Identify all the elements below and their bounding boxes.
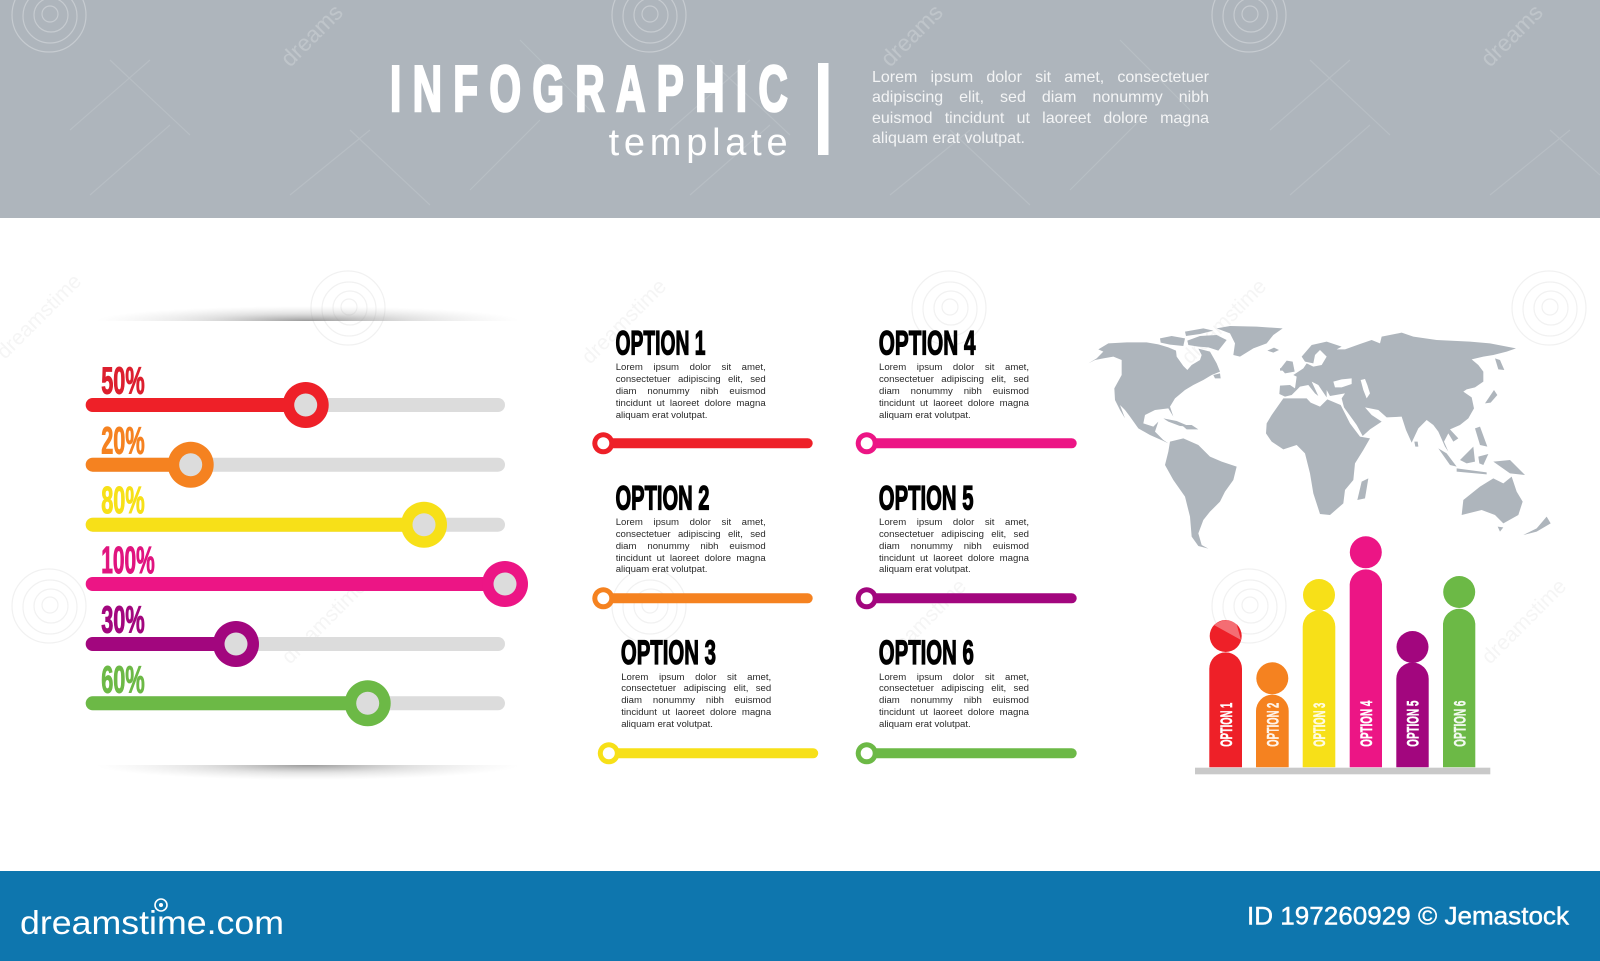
panel: option 6: OPTION 6 xyxy=(879,634,974,672)
panel: option 1: consectetuer adipiscing elit, sed xyxy=(616,374,766,385)
bar: option 2: OPTION 2 xyxy=(1264,703,1282,747)
text: dreamstime xyxy=(1177,275,1271,369)
text: dreamstime xyxy=(877,575,971,669)
slider 30% xyxy=(86,600,505,667)
text: dreamstime xyxy=(577,275,671,369)
header band xyxy=(0,0,1600,218)
panel: option 2: aliquam erat volutpat. xyxy=(616,564,707,575)
footer credit: ID 197260929 © Jemastock xyxy=(1247,902,1570,930)
panel: option 2: tincidunt ut laoreet dolore magna xyxy=(616,553,766,564)
panel: option 3 xyxy=(598,634,818,764)
chart baseline xyxy=(1195,768,1490,774)
slider 100%: 100% xyxy=(101,540,155,582)
panel: option 1 xyxy=(592,324,813,454)
panel: option 1: OPTION 1 xyxy=(616,324,706,362)
slider 80% xyxy=(86,480,505,548)
text: dreams xyxy=(875,0,948,72)
panel: option 6: aliquam erat volutpat. xyxy=(879,719,971,730)
bottom shadow xyxy=(135,765,480,778)
bar: option 2 xyxy=(1256,662,1289,767)
slider 80%: 80% xyxy=(101,480,145,522)
panel: option 1: aliquam erat volutpat. xyxy=(616,410,707,421)
panel: option 5: OPTION 5 xyxy=(879,480,974,518)
panel: option 2: diam nonummy nibh euismod xyxy=(616,541,766,552)
text: dreamstime xyxy=(1477,575,1571,669)
bar: option 6: OPTION 6 xyxy=(1450,701,1470,747)
slider 20% xyxy=(86,420,505,488)
panel: option 4: diam nonummy nibh euismod xyxy=(879,386,1029,397)
header paragraph: adipiscing elit, sed diam nonummy nibh xyxy=(872,89,1209,106)
panel: option 4: aliquam erat volutpat. xyxy=(879,410,971,421)
panel: option 3: OPTION 3 xyxy=(621,634,716,672)
bar: option 1: OPTION 1 xyxy=(1217,703,1236,747)
bar: option 4 xyxy=(1350,536,1382,767)
panel: option 6: diam nonummy nibh euismod xyxy=(879,695,1029,706)
slider 60%: 60% xyxy=(101,660,145,702)
slider 50%: 50% xyxy=(101,360,145,402)
panel: option 1: tincidunt ut laoreet dolore magna xyxy=(616,398,766,409)
text: dreams xyxy=(1475,0,1548,72)
top shadow xyxy=(135,309,480,321)
bar: option 3: OPTION 3 xyxy=(1310,703,1329,747)
slider 50% xyxy=(86,360,505,428)
panel: percentage sliders xyxy=(86,306,528,780)
panel: option 2 xyxy=(592,480,813,609)
slider 20%: 20% xyxy=(101,420,145,462)
panel: option 6: tincidunt ut laoreet dolore magna xyxy=(879,707,1029,718)
panel: option 3: Lorem ipsum dolor sit amet, xyxy=(621,672,771,682)
panel: option 2: Lorem ipsum dolor sit amet, xyxy=(616,517,766,528)
panel: option 5: Lorem ipsum dolor sit amet, xyxy=(879,517,1029,528)
panel: option 2: OPTION 2 xyxy=(616,480,710,518)
panel: option 5: aliquam erat volutpat. xyxy=(879,564,971,575)
panel: option 5: diam nonummy nibh euismod xyxy=(879,541,1029,552)
header divider bar xyxy=(818,63,828,155)
panel: option 4: tincidunt ut laoreet dolore magna xyxy=(879,398,1029,409)
bar chart xyxy=(1195,536,1490,774)
bar: option 4: OPTION 4 xyxy=(1357,700,1376,747)
bar: option 1 xyxy=(1209,620,1242,767)
footer logo: dreamstime.com xyxy=(20,904,284,941)
subtitle: template xyxy=(609,122,788,164)
panel: option 5: tincidunt ut laoreet dolore magna xyxy=(879,553,1029,564)
slider 60% xyxy=(86,660,505,726)
text: dreamstime xyxy=(277,575,371,669)
text: dreams xyxy=(275,0,348,72)
panel: option 5 xyxy=(856,480,1077,609)
panel: option 1: diam nonummy nibh euismod xyxy=(616,386,766,397)
header paragraph: aliquam erat volutpat. xyxy=(872,130,1025,147)
world map xyxy=(1088,326,1551,549)
header paragraph xyxy=(872,68,1212,158)
bar: option 5 xyxy=(1396,631,1429,767)
panel: option 4: consectetuer adipiscing elit, sed xyxy=(879,374,1029,385)
panel: option 3: tincidunt ut laoreet dolore magna xyxy=(621,707,771,718)
panel: option 3: aliquam erat volutpat. xyxy=(621,719,713,730)
panel: option 4 xyxy=(856,324,1077,454)
panel: option 4: OPTION 4 xyxy=(879,324,976,362)
panel: option 5: consectetuer adipiscing elit, sed xyxy=(879,529,1029,540)
panel: option 3: diam nonummy nibh euismod xyxy=(621,695,771,706)
footer band xyxy=(0,871,1600,961)
panel: option 1: Lorem ipsum dolor sit amet, xyxy=(616,362,766,373)
slider 30%: 30% xyxy=(101,600,145,642)
panel: option 6: Lorem ipsum dolor sit amet, xyxy=(879,672,1029,682)
panel: option 6 xyxy=(856,634,1077,764)
header paragraph: Lorem ipsum dolor sit amet, consectetuer xyxy=(872,68,1209,86)
title: INFOGRAPHIC xyxy=(390,52,799,125)
panel: option 4: Lorem ipsum dolor sit amet, xyxy=(879,362,1029,373)
panel: option 2: consectetuer adipiscing elit, sed xyxy=(616,529,766,540)
bar: option 5: OPTION 5 xyxy=(1404,701,1423,747)
slider 100% xyxy=(86,540,528,607)
bar: option 6 xyxy=(1443,576,1475,767)
bar: option 3 xyxy=(1303,579,1335,767)
panel: option 3: consectetuer adipiscing elit, sed xyxy=(621,683,771,694)
header paragraph: euismod tincidunt ut laoreet dolore magna xyxy=(872,110,1209,127)
panel: option 6: consectetuer adipiscing elit, sed xyxy=(879,683,1029,694)
